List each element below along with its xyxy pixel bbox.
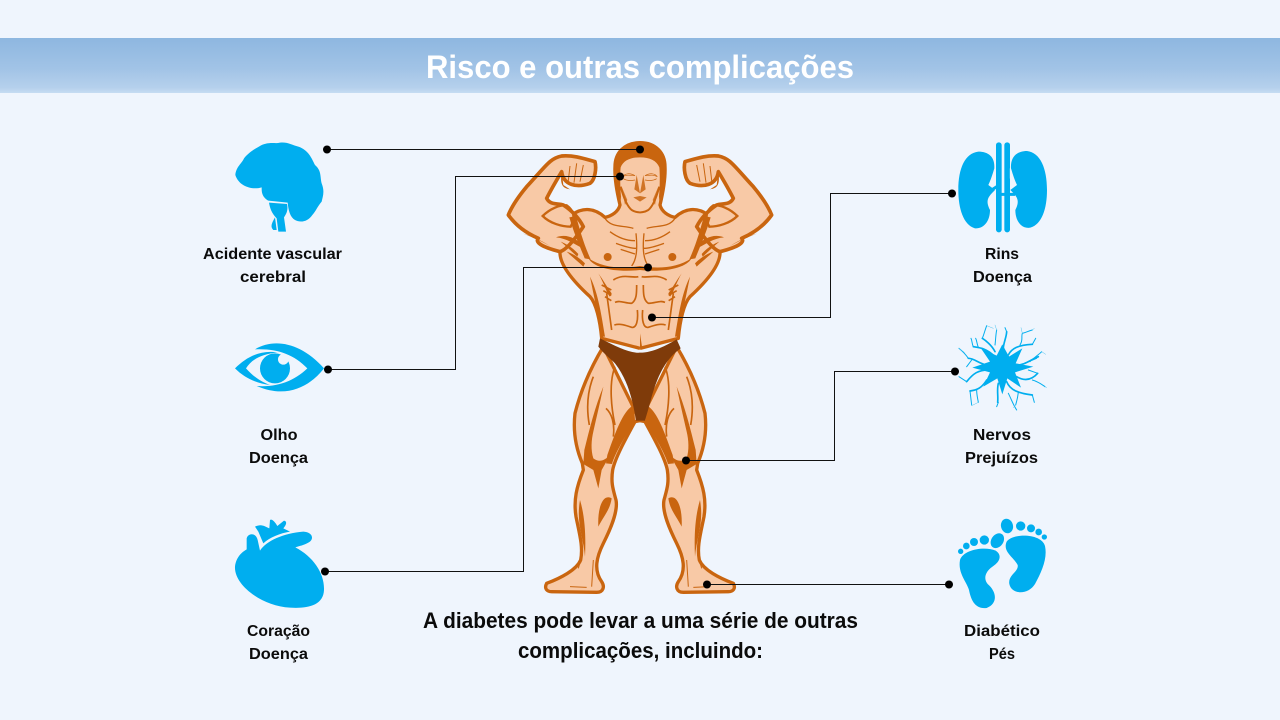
connector: heart	[321, 264, 652, 576]
connector: kidneys	[648, 190, 956, 322]
label: stroke: Acidente vascular	[203, 246, 342, 263]
connector: nerves	[682, 368, 959, 464]
label: nerve damage: Nervos	[973, 427, 1031, 444]
icon: feet	[958, 517, 1047, 608]
label: diabetic feet: Diabético	[964, 623, 1040, 640]
label: stroke: cerebral	[240, 269, 306, 286]
label: stroke	[203, 246, 342, 286]
label: kidney disease	[973, 246, 1032, 286]
label: kidney disease: Rins	[985, 246, 1019, 263]
title banner: Risco e outras complicações	[426, 49, 854, 85]
connector: feet	[703, 580, 953, 588]
label: heart disease: Coração	[247, 623, 310, 640]
label: eye disease	[249, 427, 308, 467]
label: diabetic feet: Pés	[989, 646, 1015, 663]
label: heart disease	[247, 623, 310, 663]
title banner	[0, 38, 1280, 93]
caption text: A diabetes pode levar a uma série de outras	[423, 608, 858, 633]
caption text	[423, 608, 858, 663]
icon: brain	[235, 142, 323, 232]
muscular body illustration	[508, 143, 772, 592]
connector: eye	[324, 172, 624, 374]
caption text: complicações, incluindo:	[518, 638, 763, 663]
label: nerve damage	[965, 427, 1038, 467]
label: diabetic feet	[964, 623, 1040, 663]
label: kidney disease: Doença	[973, 269, 1032, 286]
icon: eye	[235, 343, 324, 391]
icon: heart	[235, 520, 324, 608]
label: heart disease: Doença	[249, 646, 308, 663]
label: nerve damage: Prejuízos	[965, 450, 1038, 467]
label: eye disease: Doença	[249, 450, 308, 467]
connector: stroke to head	[323, 146, 644, 154]
label: eye disease: Olho	[260, 427, 298, 444]
icon: nerve cell	[959, 325, 1047, 410]
icon: kidneys	[958, 142, 1047, 232]
